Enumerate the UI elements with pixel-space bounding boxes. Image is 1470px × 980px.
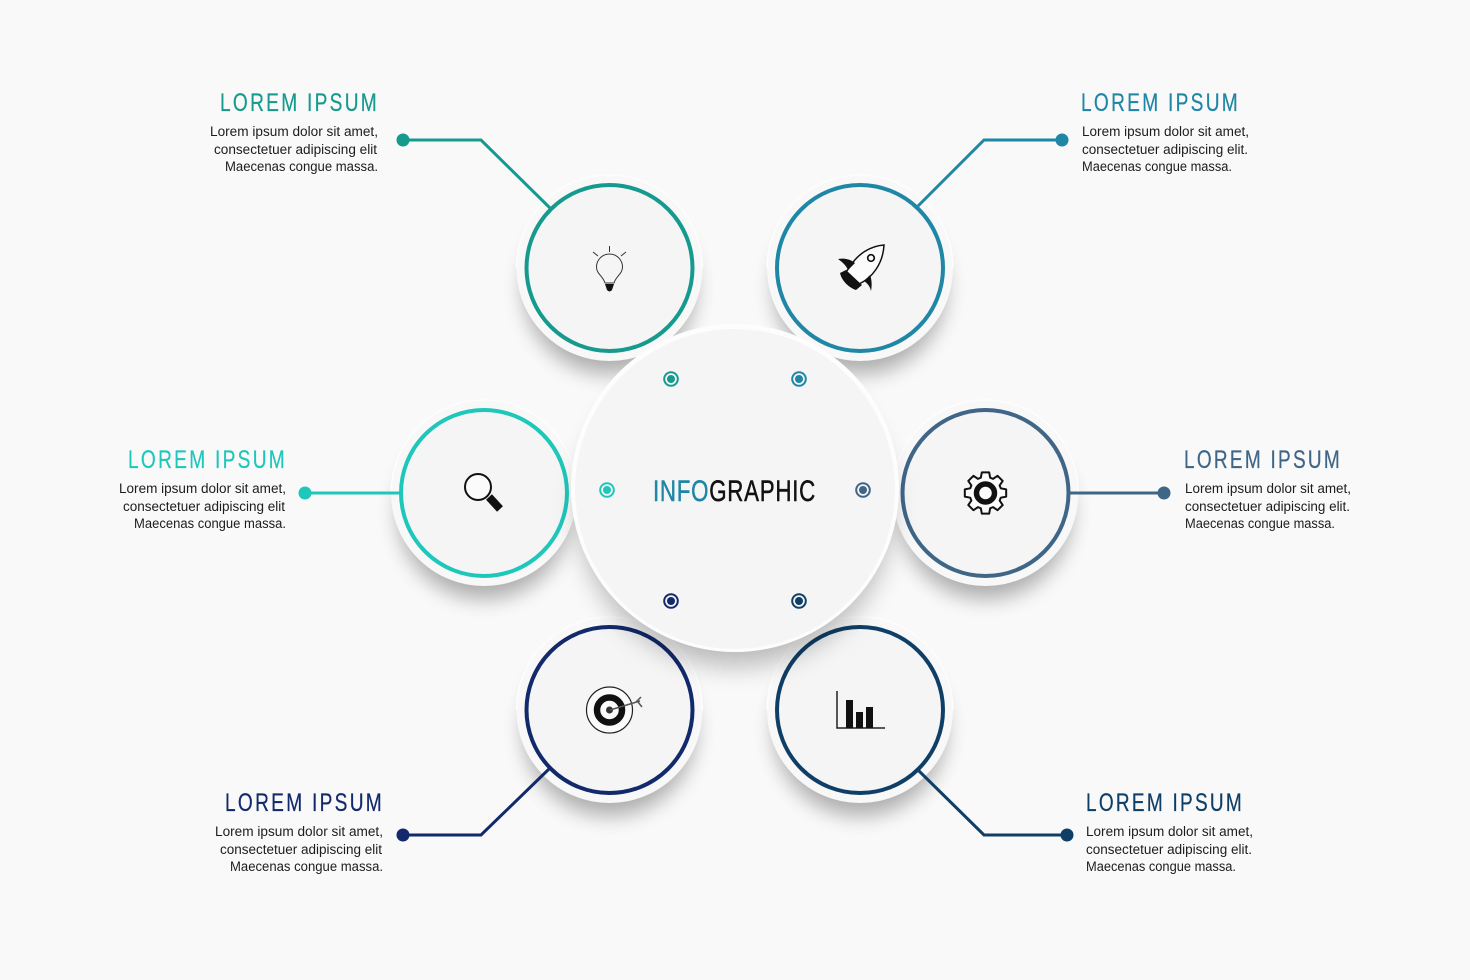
body text: [215, 824, 383, 874]
body text: Maecenas congue massa.: [230, 859, 383, 874]
heading: LOREM IPSUM: [1184, 446, 1342, 474]
body text: Lorem ipsum dolor sit amet,: [119, 481, 286, 496]
icon: bar chart: [837, 691, 885, 728]
body text: [119, 481, 286, 531]
heading: LOREM IPSUM: [225, 789, 384, 817]
heading: LOREM IPSUM: [128, 446, 287, 474]
body text: [1185, 481, 1351, 531]
panel: middle right step: [892, 400, 1351, 599]
icon: target with arrow: [586, 687, 642, 733]
heading: LOREM IPSUM: [1081, 89, 1240, 117]
body text: Maecenas congue massa.: [1082, 159, 1232, 174]
panel: central circle: [571, 324, 899, 666]
body text: consectetuer adipiscing elit.: [1082, 142, 1248, 157]
body text: Lorem ipsum dolor sit amet,: [210, 124, 378, 139]
panel: bottom left step: [215, 617, 702, 874]
body text: consectetuer adipiscing elit: [214, 142, 377, 157]
body text: [210, 124, 378, 174]
icon: magnifying glass: [465, 474, 500, 509]
panel: top left step: [210, 89, 702, 374]
body text: consectetuer adipiscing elit: [123, 499, 285, 514]
body text: consectetuer adipiscing elit.: [1086, 842, 1252, 857]
connector line: [918, 134, 1068, 206]
body text: Lorem ipsum dolor sit amet,: [1086, 824, 1253, 839]
body text: [1082, 124, 1249, 174]
icon: gear: [965, 472, 1006, 514]
body text: Lorem ipsum dolor sit amet,: [1082, 124, 1249, 139]
connector line: [1070, 486, 1170, 500]
body text: Lorem ipsum dolor sit amet,: [1185, 481, 1351, 496]
marker dots: [600, 372, 870, 608]
body text: consectetuer adipiscing elit: [220, 842, 382, 857]
panel: bottom right step: [767, 617, 1253, 874]
connector line: [396, 769, 549, 842]
connector line: [919, 771, 1074, 842]
body text: Maecenas congue massa.: [225, 159, 378, 174]
body text: [1086, 824, 1253, 874]
body text: consectetuer adipiscing elit.: [1185, 499, 1350, 514]
heading: LOREM IPSUM: [220, 89, 379, 117]
connector line: [396, 134, 550, 208]
title: INFOGRAPHIC: [653, 475, 816, 508]
heading: LOREM IPSUM: [1086, 789, 1244, 817]
body text: Maecenas congue massa.: [1086, 859, 1236, 874]
body text: Maecenas congue massa.: [134, 516, 286, 531]
panel: top right step: [767, 89, 1249, 374]
connector line: [298, 486, 400, 500]
icon: light bulb: [593, 246, 626, 292]
body text: Lorem ipsum dolor sit amet,: [215, 824, 383, 839]
body text: Maecenas congue massa.: [1185, 516, 1335, 531]
icon: rocket: [838, 245, 884, 291]
panel: middle left step: [119, 400, 577, 599]
